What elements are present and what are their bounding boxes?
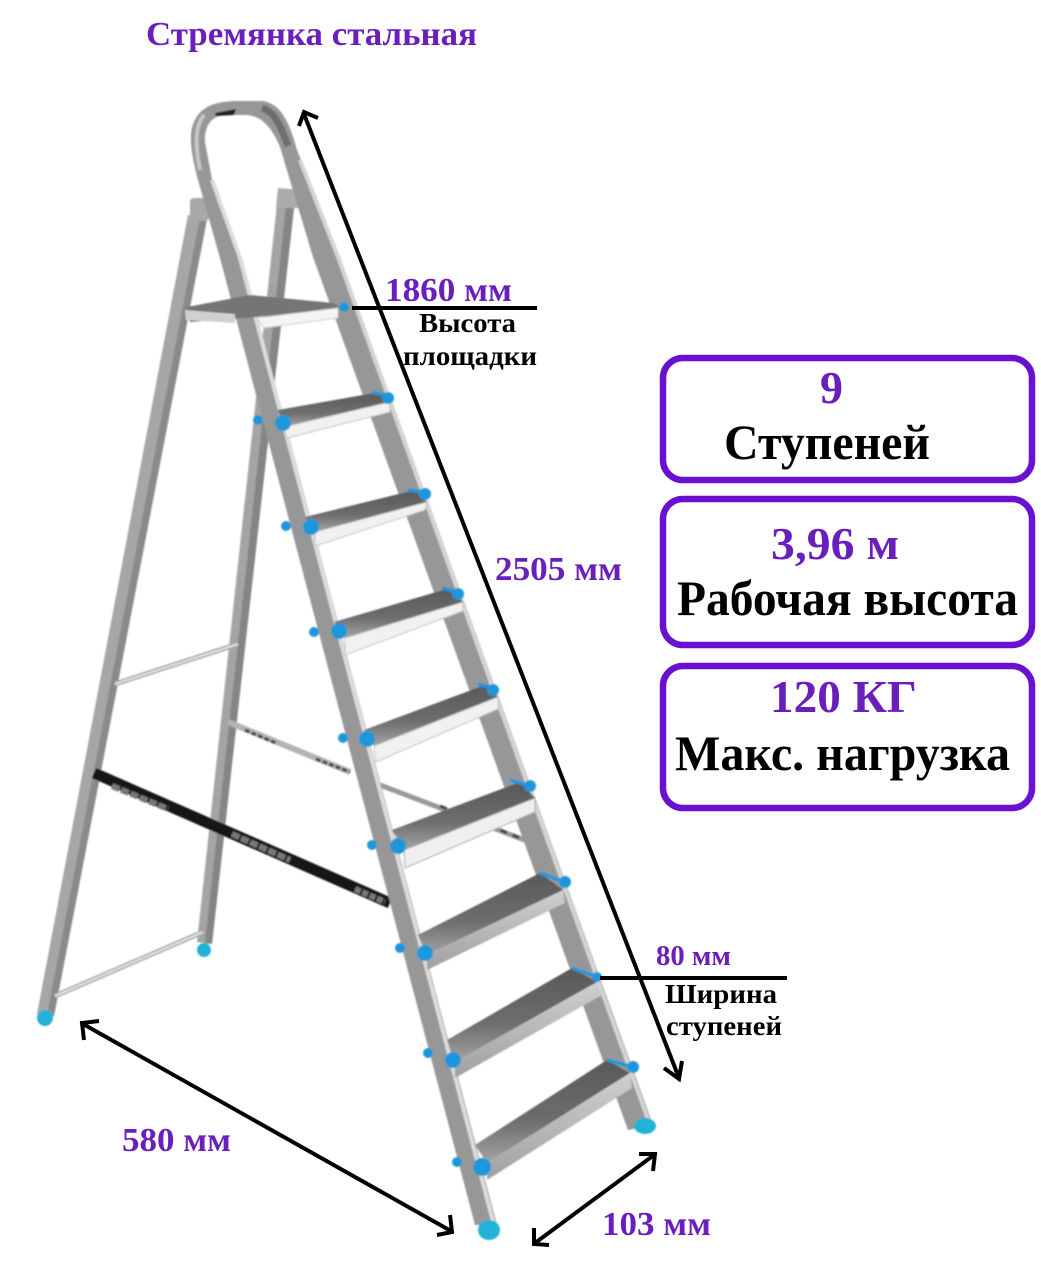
blue step caps <box>253 302 639 1176</box>
label: platform height: Высота <box>419 308 517 338</box>
label: step width: ступеней <box>666 1011 782 1041</box>
arrow: total length 2505 mm <box>299 112 682 1079</box>
step 5 <box>364 685 498 762</box>
panel: max load: 120 КГ <box>770 671 917 722</box>
panel: working height: Рабочая высота <box>677 570 1018 626</box>
back right leg <box>197 188 302 944</box>
panel: max load <box>663 666 1032 808</box>
title: Стремянка стальная <box>146 16 477 53</box>
grey strap <box>228 722 540 846</box>
back left leg <box>37 198 209 1016</box>
front frame with arch <box>191 101 653 1225</box>
panel: steps count <box>663 358 1032 480</box>
label: 1860 mm: 1860 мм <box>385 272 512 309</box>
leader line: step width <box>600 976 787 980</box>
label: platform height: площадки <box>403 341 537 371</box>
panel: working height <box>663 499 1032 645</box>
label: step width: Ширина <box>665 979 778 1009</box>
leader line: platform height <box>352 306 537 310</box>
panel: steps count: Ступеней <box>724 414 930 470</box>
ladder illustration <box>37 101 656 1240</box>
label: 2505 mm: 2505 мм <box>495 551 622 588</box>
step 2 <box>278 392 390 438</box>
panel: working height: 3,96 м <box>771 518 899 569</box>
black strap <box>94 773 390 903</box>
arrow: base 580 mm <box>82 1021 452 1235</box>
panel: steps count: 9 <box>820 362 843 413</box>
label: platform height <box>403 308 537 371</box>
step 3 <box>305 490 427 546</box>
label: 580 mm: 580 мм <box>122 1122 231 1159</box>
step 9 <box>475 1060 632 1180</box>
teal rubber feet <box>37 943 656 1240</box>
arrow: width 103 mm <box>534 1154 655 1245</box>
step 8 <box>447 968 602 1078</box>
step 4 <box>334 588 463 655</box>
label: step width <box>665 979 782 1041</box>
label: 80 mm: 80 мм <box>656 941 731 972</box>
step 6 <box>392 782 535 868</box>
upper rear brace <box>115 644 238 684</box>
panel: max load: Макс. нагрузка <box>675 725 1010 781</box>
top platform <box>185 295 342 328</box>
lower rear brace <box>55 932 203 996</box>
step 7 <box>418 873 565 970</box>
label: 103 mm: 103 мм <box>602 1206 711 1243</box>
